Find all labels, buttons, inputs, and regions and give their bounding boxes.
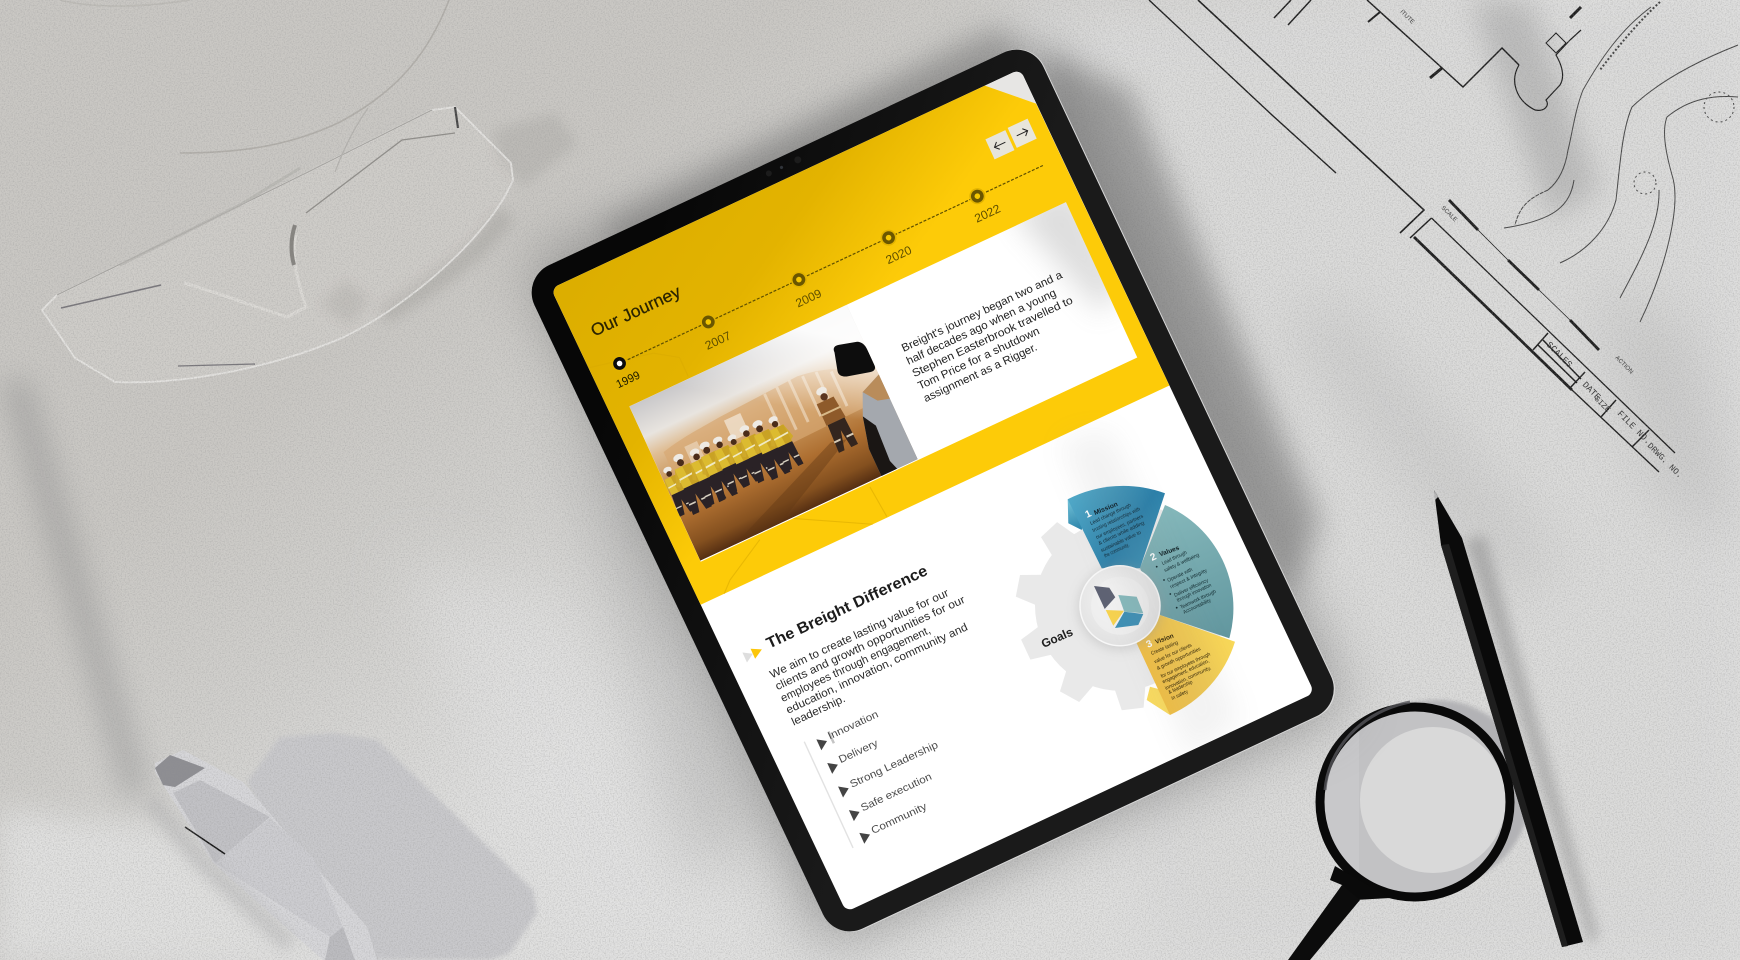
vision sector: & leadership [1168,679,1194,696]
list item: Community: Community [870,801,929,837]
values sector: Operate with [1167,567,1194,584]
mission sector [1068,486,1165,568]
journey paragraph: assignment as a Rigger. [922,342,1039,405]
values sector: 2 [1149,551,1159,564]
values sector: Accountability [1182,598,1212,616]
goals gear diagram [1015,486,1235,715]
heading: Our Journey: Our Journey [588,282,684,340]
blueprint drawing [1149,0,1738,481]
mission sector: & clients while adding [1098,520,1146,547]
journey paragraph: Stephen Easterbrook travelled to [910,295,1075,380]
screen [562,77,1304,905]
blueprint title block: DATE [1580,380,1602,402]
milestone 1999: 1999 [615,370,642,391]
heading arrows [742,644,764,663]
tablet [545,54,1308,909]
blueprint landscape curves [1504,2,1738,322]
pencil [1434,490,1598,947]
centre hub with logo [1079,566,1161,649]
list rule [804,742,853,848]
truck mirror [834,342,875,376]
vision sector: engagement, education, [1162,658,1210,685]
truck body [862,374,918,476]
mission sector: our employees, partners [1095,513,1145,541]
milestone 2022 [964,182,1003,226]
blueprint title block: SIZE [1592,395,1612,415]
difference paragraph: leadership. [790,693,847,728]
milestone 2009 [784,266,824,310]
values sector: safety & wellbeing [1163,552,1200,574]
blueprint building outline [1274,0,1581,110]
blueprint building outline: ITUTE [1399,9,1415,26]
blueprint scale bar: SCALE [1440,205,1458,223]
blueprint title block: FILE NO. [1615,409,1653,447]
list item: Community [859,801,930,844]
difference paragraph: education, innovation, community and [784,621,970,717]
values sector: respect & integrity [1169,568,1208,590]
mission sector: trusting relationships with [1092,506,1141,534]
navigation arrows [985,119,1037,159]
list item: Delivery [826,738,882,774]
mission sector: sustainable value to [1100,530,1142,554]
white content panel [629,202,1137,562]
journey paragraph: Tom Price for a shutdown [916,325,1042,392]
journey paragraph [899,269,1088,405]
vision sector: value for our clients [1153,642,1193,665]
mission sector: the community. [1103,542,1131,559]
crew of workers [663,416,804,516]
values sector: Values [1158,544,1181,558]
mission sector: Mission [1093,501,1119,517]
ground track [735,440,846,544]
milestone 2007: 2007 [703,328,733,353]
vision sector: Create lasting [1150,640,1179,657]
top corner fold [985,69,1036,120]
milestone 2007 [694,308,733,353]
values list [816,692,962,844]
values sector: Lead through [1161,550,1188,567]
safety glasses [42,107,578,382]
blueprint scale bar: ACTION [1614,355,1634,375]
vision sector: innovation, community, [1164,665,1212,692]
blueprint title block [1533,333,1684,481]
heading: The Breight Difference: The Breight Difference [764,562,931,652]
list item: Innovation [816,709,882,750]
journey paragraph: Breight's journey began two and a [900,269,1065,355]
panel shading band [1015,202,1114,312]
milestone 2020: 2020 [884,243,914,267]
mission sector: Lead change through [1089,502,1132,527]
list item: Safe execution: Safe execution [859,771,934,814]
difference paragraph [768,582,984,728]
photo: workers on a dusty site [626,304,920,564]
lone worker [816,387,858,453]
vision sector: & growth opportunities [1156,646,1202,672]
vision sector: for our employees through [1160,652,1212,680]
difference paragraph: employees through engagement, [779,624,933,705]
journey paragraph: half decades ago when a young [905,287,1058,368]
list item: Delivery: Delivery [837,738,881,766]
values sector [1140,505,1233,638]
difference paragraph: clients and growth opportunities for our [774,594,967,693]
sky fade to white [694,305,878,417]
list item: Strong Leadership [838,740,941,797]
values sector: Deliver efficiency [1173,578,1210,599]
timeline [606,158,1056,394]
magnifying glass [1288,700,1530,960]
milestone 2022: 2022 [972,201,1003,226]
list item: Strong Leadership: Strong Leadership [849,740,940,791]
gear [1015,501,1225,711]
milestone 2020 [875,224,914,267]
mission sector: 1 [1084,508,1094,521]
blueprint scale bar [1440,200,1634,375]
values sector: through innovation [1176,582,1213,604]
blueprint title block: SCALES [1544,340,1574,370]
list item: Innovation: Innovation [826,709,881,742]
tablet shadow [530,25,1345,945]
list item: Safe execution [848,771,935,821]
vision sector: in safety [1171,689,1189,702]
hard hat outline [60,0,449,153]
milestone 2009: 2009 [793,286,824,310]
values sector: Teamwork through [1179,589,1217,611]
vision sector [1137,615,1235,715]
vision sector: Vision [1154,633,1175,646]
background gantry [664,369,879,475]
soft light band across the screen [1076,441,1226,740]
vision sector: 3 [1145,638,1155,651]
yellow journey panel [551,68,1169,606]
tablet body [552,55,1305,906]
label: Goals: Goals [1039,625,1075,651]
blueprint title block: DRWG. NO. [1645,441,1684,481]
paper roll [150,733,537,960]
difference paragraph: We aim to create lasting value for our [768,587,951,681]
milestone 1999 [606,350,642,391]
blueprint outer lines [1149,0,1675,472]
